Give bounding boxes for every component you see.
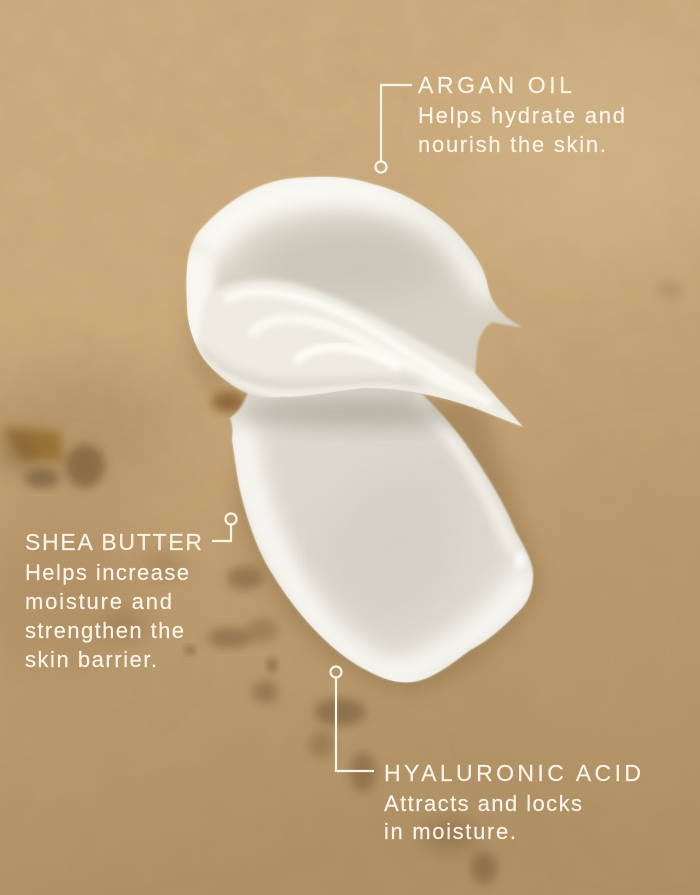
shadow: between the two cream smears <box>212 392 244 412</box>
cream swatch: upper smear with folded swirl <box>180 172 530 432</box>
text: Shea Butter description: strengthen the <box>25 618 184 643</box>
leader line: Argan Oil <box>376 85 412 172</box>
callout: Shea Butter <box>25 514 236 672</box>
text: Hyaluronic Acid description: in moisture. <box>384 819 516 844</box>
heading: Argan Oil: ARGAN OIL <box>418 72 572 98</box>
text: Argan Oil description: Helps hydrate and <box>418 103 625 128</box>
text: Hyaluronic Acid description <box>384 791 582 844</box>
callout: Hyaluronic Acid <box>330 666 641 844</box>
cream shadow <box>188 300 540 692</box>
cream swatch: lower smear <box>225 385 540 695</box>
callout: Argan Oil <box>376 72 625 172</box>
text: Shea Butter description <box>25 560 189 672</box>
text: Shea Butter description: skin barrier. <box>25 647 157 672</box>
text: Shea Butter description: moisture and <box>25 589 172 614</box>
leader line: Shea Butter <box>212 514 236 541</box>
text: Shea Butter description: Helps increase <box>25 560 189 585</box>
stains: dark marks on stone <box>0 428 497 884</box>
heading: Hyaluronic Acid: HYALURONIC ACID <box>384 760 641 786</box>
text: Argan Oil description <box>418 103 625 157</box>
text: Argan Oil description: nourish the skin. <box>418 132 606 157</box>
text: Hyaluronic Acid description: Attracts and locks <box>384 791 582 816</box>
leader line: Hyaluronic Acid <box>330 666 374 771</box>
heading: Shea Butter: SHEA BUTTER <box>25 529 202 555</box>
